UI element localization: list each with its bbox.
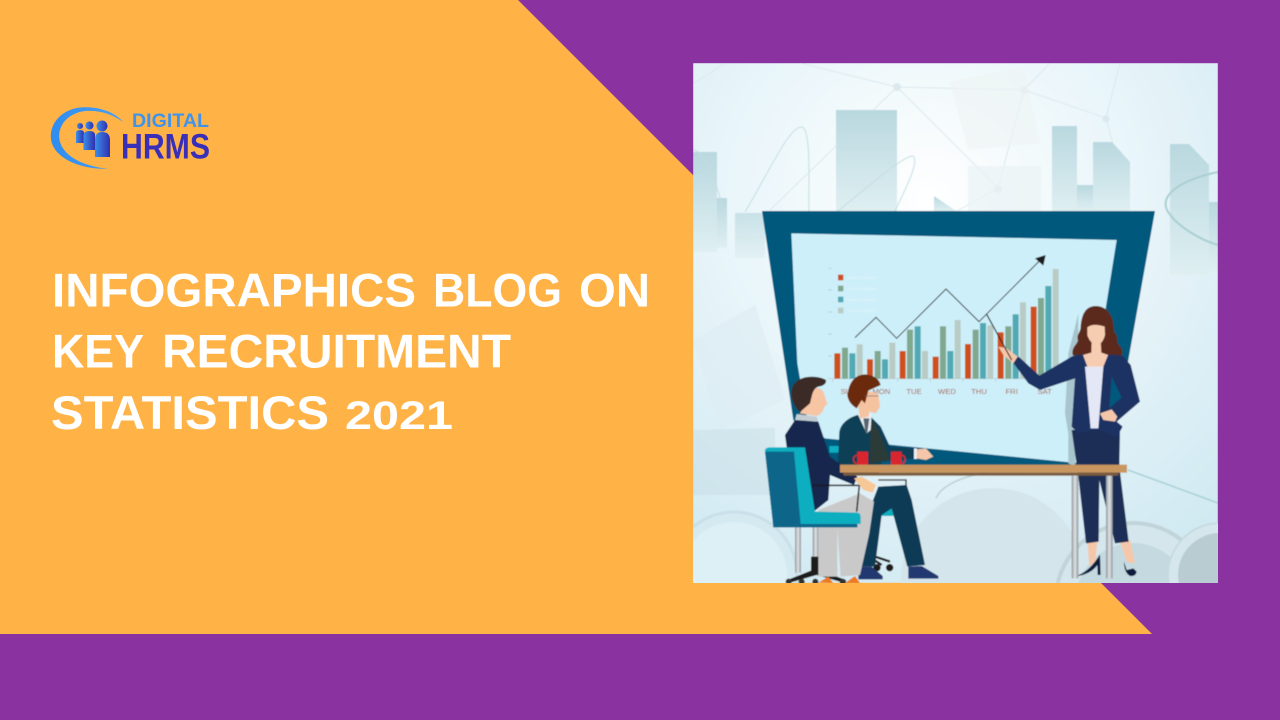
bar chart: [828, 268, 1063, 396]
bars: grey series: [857, 269, 1059, 379]
title: INFOGRAPHICS: [52, 264, 416, 318]
title: ON: [579, 264, 650, 318]
chart legend: Lorem ipsum: [847, 286, 876, 292]
chart axis: [828, 268, 1024, 382]
woman pointing hand: [998, 347, 1018, 363]
skyline buildings: [693, 110, 1218, 275]
rear chair: [829, 446, 906, 571]
man two hair: [847, 374, 881, 408]
day labels: SAT: [1037, 387, 1052, 396]
man two shirt and tie: [857, 413, 872, 433]
woman face: [1087, 325, 1105, 345]
chair legs: [795, 527, 801, 573]
day labels: SUN: [841, 387, 857, 396]
thin curved lines: [693, 127, 1218, 503]
title: STATISTICS: [51, 387, 329, 440]
pointer stick: [987, 314, 1012, 360]
day labels: TUE: [906, 387, 922, 396]
icon: three people: [76, 120, 110, 157]
logo word: DIGITAL: DIGITAL: [132, 110, 209, 132]
lower background circles: [900, 488, 1071, 583]
chart legend: Lorem ipsum: [847, 275, 876, 281]
bars: orange series: [834, 307, 1037, 379]
chair armrest: [813, 485, 859, 512]
chart legend: Lorem ipsum: [847, 297, 876, 303]
man one and front chair: [765, 377, 876, 585]
man one trousers: [818, 493, 874, 577]
day labels: MON: [872, 387, 890, 396]
day labels: FRI: [1005, 387, 1018, 396]
presenter woman: [987, 306, 1140, 576]
day labels: THU: [971, 387, 987, 396]
man two jacket: [837, 415, 915, 475]
woman shoes: [1078, 554, 1137, 576]
chart legend: [838, 275, 876, 314]
man one hand: [854, 477, 876, 493]
woman neck and chest: [1082, 342, 1109, 368]
man one hair: [791, 377, 826, 412]
man one collar: [795, 414, 818, 422]
title: [51, 264, 650, 440]
woman legs: [1087, 540, 1135, 567]
mugs: [853, 452, 905, 465]
man one shoes: [818, 576, 860, 583]
title: BLOG: [433, 264, 562, 318]
chair base: [786, 557, 846, 585]
presentation board frame: [762, 211, 1155, 466]
illustration figures, drawn at 3x and scaled: [762, 211, 1155, 585]
icon: blue swoosh: [51, 107, 123, 169]
woman trousers: [1072, 430, 1129, 543]
bars: green series: [842, 298, 1044, 379]
man two shoes: [858, 566, 938, 579]
title: 2021: [345, 394, 453, 438]
panel: orange background: [0, 0, 1152, 634]
chair seat and back: [765, 447, 861, 527]
table top: [840, 465, 1127, 473]
day labels: [840, 388, 1052, 395]
bars: teal series: [849, 286, 1051, 379]
title: RECRUITMENT: [162, 326, 511, 378]
man two glasses: [865, 395, 878, 397]
man one sweater: [785, 420, 857, 511]
gap between arm and waist: [1109, 377, 1122, 408]
day labels: WED: [938, 387, 956, 396]
title: KEY: [52, 326, 144, 378]
woman blazer and arm: [1012, 354, 1140, 437]
trend line arrow: [855, 255, 1046, 338]
table legs: [1072, 476, 1078, 578]
meeting table: [840, 465, 1127, 578]
man two trousers: [858, 485, 925, 567]
presentation screen: [791, 233, 1117, 464]
illustration background: [693, 63, 1218, 583]
network lines: [770, 63, 1112, 212]
chart legend: Lorem ipsum: [847, 308, 876, 314]
woman hand on hip: [1100, 409, 1117, 422]
woman shadow: [1065, 313, 1078, 467]
man one face: [800, 388, 827, 416]
man two cuff and hand: [914, 448, 917, 459]
man two face: [858, 390, 880, 418]
woman hair: [1072, 306, 1122, 358]
logo: Digital HRMS: [51, 107, 210, 169]
panel: presentation illustration: [693, 63, 1218, 583]
woman shirt: [1085, 367, 1103, 428]
back chair and man two: [829, 374, 938, 579]
logo word: HRMS: HRMS: [121, 128, 210, 166]
